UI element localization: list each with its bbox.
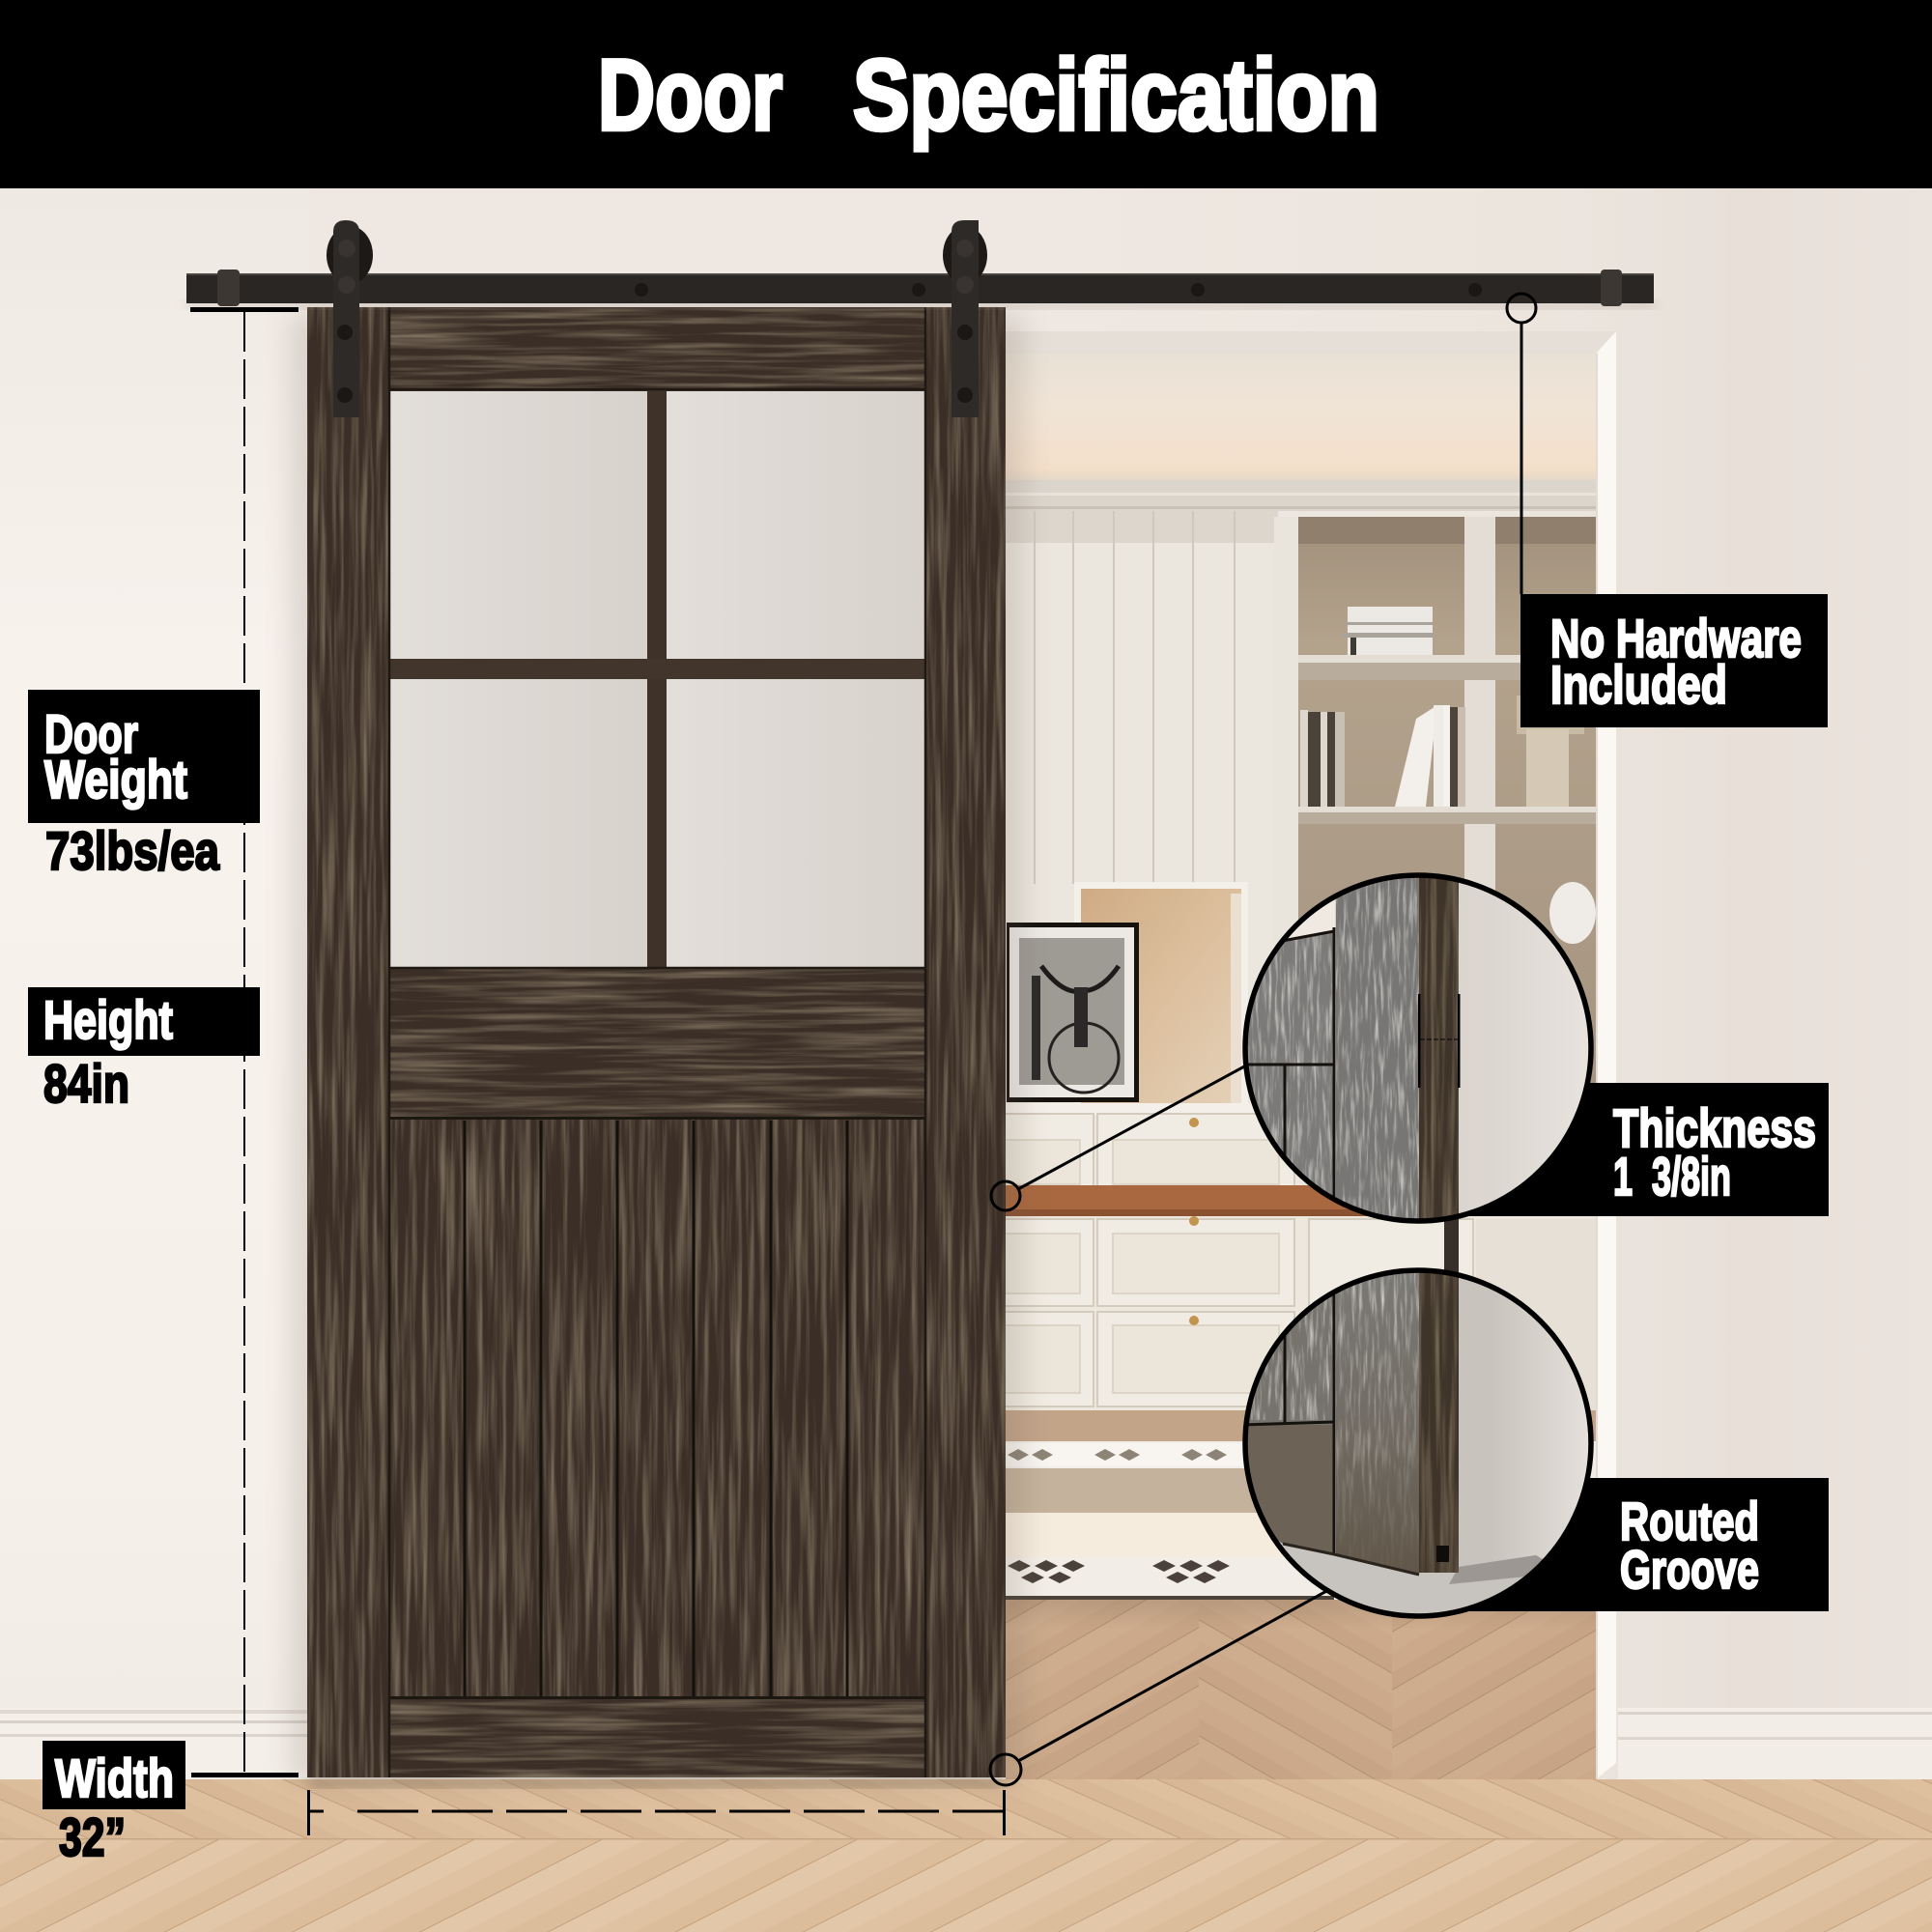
label: thickness: Thickness xyxy=(1613,1097,1816,1158)
label: height xyxy=(28,987,260,1056)
doorway interior room xyxy=(1005,331,1616,1779)
baseboard right xyxy=(1618,1708,1932,1779)
ceiling glow xyxy=(1006,354,1596,480)
value: height: 84in xyxy=(43,1053,129,1114)
wood countertop xyxy=(1006,1185,1392,1216)
label: no hardware included: Included xyxy=(1550,654,1727,715)
white vase xyxy=(1549,882,1596,944)
floor xyxy=(1513,1556,1543,1584)
cover above panel xyxy=(1288,899,1335,939)
sculpture xyxy=(1517,696,1584,807)
value: width: 32” xyxy=(59,1806,126,1867)
lag bolts xyxy=(635,283,1482,297)
door bottom edge xyxy=(1283,1544,1419,1575)
left hanger xyxy=(327,220,373,417)
baseboard left xyxy=(0,1708,307,1779)
title: Specification xyxy=(853,40,1379,152)
height dimension line xyxy=(190,307,298,1777)
label: height: Height xyxy=(43,989,173,1050)
routed groove notch xyxy=(1436,1546,1449,1562)
door panels xyxy=(1248,1296,1333,1553)
label: width: Width xyxy=(55,1747,174,1808)
grey panels xyxy=(1248,933,1333,1196)
glass panes xyxy=(389,391,924,967)
label: thickness: 1 3/8in xyxy=(1613,1146,1731,1207)
beadboard wall xyxy=(1006,511,1278,1110)
framed bicycle photo xyxy=(1007,923,1139,1102)
leaning art canvas xyxy=(1074,882,1248,1103)
lintel xyxy=(1006,331,1616,354)
label: door weight: Weight xyxy=(44,749,187,810)
cover below door bottom xyxy=(1336,1556,1412,1575)
label: door weight xyxy=(28,690,260,823)
panel seams xyxy=(389,307,925,1777)
leader: rail to no hardware label xyxy=(1507,294,1536,594)
label: routed groove: Groove xyxy=(1620,1539,1759,1600)
label: door weight: Door xyxy=(44,703,138,764)
detail circle: routed groove xyxy=(1241,1265,1599,1623)
door face xyxy=(1334,1270,1419,1576)
detail circle: thickness xyxy=(1241,869,1599,1227)
sliding rail xyxy=(186,270,1655,309)
title: Door xyxy=(598,40,782,152)
barn door xyxy=(290,307,1024,1782)
leader: door edge to thickness detail xyxy=(991,1065,1246,1210)
book stack xyxy=(1341,607,1434,655)
floor behind door xyxy=(1006,1410,1596,1443)
grooves xyxy=(1241,1294,1334,1554)
right hanger xyxy=(943,220,987,417)
bookshelf xyxy=(1274,517,1596,1135)
label: routed groove xyxy=(1454,1478,1829,1611)
label: no hardware included xyxy=(1520,594,1828,727)
width dimension line xyxy=(307,1790,1006,1835)
crown moulding xyxy=(1006,480,1596,511)
door edge xyxy=(1419,869,1459,1227)
rails with grain xyxy=(389,308,924,1777)
grooves xyxy=(1248,927,1335,1198)
brass knobs xyxy=(1189,1118,1199,1325)
lower plank panel xyxy=(389,1117,924,1699)
door edge xyxy=(1419,1270,1459,1573)
upright books xyxy=(1300,705,1465,807)
herringbone floor in room xyxy=(1006,1600,1596,1779)
rail stops xyxy=(217,270,1622,306)
value: door weight: 73lbs/ea xyxy=(45,820,220,881)
door face xyxy=(1336,874,1419,1227)
leader: door bottom to groove detail xyxy=(990,1589,1330,1785)
title xyxy=(598,40,1379,152)
rug xyxy=(1006,1441,1596,1600)
thickness marks xyxy=(1418,994,1461,1088)
label: routed groove: Routed xyxy=(1620,1491,1759,1551)
wood floor foreground xyxy=(0,1778,1932,1932)
title bar xyxy=(0,0,1932,188)
cabinet xyxy=(1005,1103,1596,1412)
door jamb right xyxy=(1596,331,1616,1779)
label: thickness xyxy=(1454,1083,1829,1216)
label: no hardware included: No Hardware xyxy=(1550,608,1802,668)
stiles with grain xyxy=(307,307,1006,1777)
door frame xyxy=(307,307,1006,1777)
